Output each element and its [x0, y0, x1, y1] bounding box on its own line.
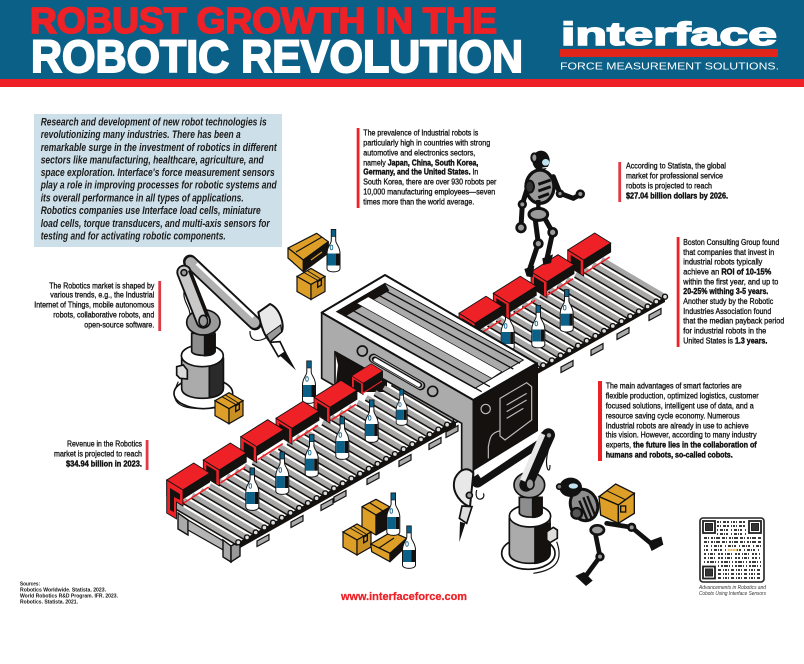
machine opening [335, 352, 387, 392]
bottle behind blocks [302, 361, 316, 403]
company logo [560, 16, 779, 72]
sources: Sources: [20, 582, 40, 588]
panel: introduction: sectors like manufacturing, healthcare, agriculture, and [41, 154, 264, 166]
callout: smart factories: The main advantages of smart factories are [606, 381, 742, 391]
sources: Robotics. Statista. 2021. [20, 600, 78, 606]
callout: smart factories: flexible production, optimized logistics, customer [606, 391, 759, 401]
front conveyor [175, 382, 458, 562]
walking robot [517, 151, 584, 277]
callout: industrial robot density: automotive and electronics sectors, [363, 147, 475, 157]
conveyor legs [178, 426, 458, 562]
sources: Robotics Worldwide. Statista. 2023. [20, 588, 106, 594]
wide box [288, 233, 328, 272]
arm two wrist and tool [454, 469, 473, 507]
callout: professional service robots market [618, 161, 728, 202]
panel: introduction: load cells, torque transducers, and multi-axis sensors for [41, 218, 270, 230]
callout: robotics market trends [34, 280, 161, 331]
callout: smart factories: experts, the future lies in the collaboration of [606, 440, 757, 450]
boxes and bottle upper [288, 230, 340, 300]
red blocks back [459, 233, 611, 339]
callout: return on investment: 20-25% withing 3-5 years. [683, 286, 768, 296]
callout: industrial robot density: South Korea, there are over 930 robots per [363, 177, 496, 187]
red blocks front [167, 364, 383, 519]
callout: robotics revenue: market is projected to reach [54, 449, 142, 459]
right face [473, 363, 537, 470]
robot arm left [174, 262, 296, 409]
callout: return on investment: achieve an ROI of 10-15% [683, 266, 772, 276]
callout: robotics revenue: $34.94 billion in 2023. [66, 458, 142, 468]
header banner [0, 0, 804, 87]
panel: introduction: play a role in improving processes for robotic systems and [40, 180, 277, 192]
callout: robotics market trends: various trends, e.g., the Industrial [50, 290, 154, 300]
company logo: interface [561, 16, 777, 52]
callout: return on investment: that the median payback period [683, 316, 785, 326]
QR code [700, 518, 764, 582]
robot torso [566, 485, 602, 525]
sources: World Robotics R&D Program. IFR. 2023. [20, 594, 118, 600]
callout: robotics market trends: open-source software. [84, 320, 154, 330]
QR finder squares [703, 521, 761, 578]
callout: smart factories: this vision. However, according to many industry [606, 430, 757, 440]
robot head [559, 478, 582, 497]
callout: industrial robot density: Germany, and the United States. In [363, 167, 479, 177]
title line one: ROBUST GROWTH IN THE [30, 0, 497, 41]
machine housing [322, 275, 537, 479]
callout: industrial robot density: times more than the world average. [363, 197, 474, 207]
panel: introduction [34, 114, 282, 247]
top deck [322, 275, 537, 400]
website url: www.interfaceforce.com [340, 591, 467, 603]
title line two: ROBOTIC REVOLUTION [31, 31, 523, 82]
right face control panel [481, 383, 532, 458]
callout: industrial robot density: 10,000 manufacturing employees—seven [363, 187, 496, 197]
callout: smart factories: focused solutions, intelligent use of data, and a [606, 400, 754, 410]
panel: introduction: testing and for activating robotic components. [41, 230, 226, 242]
callout: professional service robots market: market for professional service [626, 171, 723, 181]
panel: introduction: remarkable surge in the investment of robotics in different [41, 142, 277, 154]
callout: professional service robots market: robots is projected to reach [626, 181, 712, 191]
callout: robotics market trends: robots, collaborative robots, and [53, 310, 155, 320]
callout: smart factories: resource saving cycle economy. Numerous [606, 410, 740, 420]
QR caption: Cobots Using Interface Sensors [699, 591, 766, 597]
callout: robotics revenue: Revenue in the Robotics [67, 439, 142, 449]
callout: return on investment: Boston Consulting Group found [683, 237, 780, 247]
wide gold box [371, 532, 407, 562]
callout: smart factories: Industrial robots are already in use to achieve [606, 420, 749, 430]
arm two links [477, 435, 548, 482]
callout: return on investment: United States is 1.3 years. [683, 335, 767, 345]
first block tall frame [167, 480, 183, 519]
back conveyor [459, 233, 665, 381]
small box near left robot [215, 393, 243, 424]
callout: professional service robots market: $27.04 billion dollars by 2026. [626, 191, 728, 201]
feet [524, 254, 553, 277]
callout: industrial robot density: particularly high in countries with strong [363, 138, 491, 148]
callout: robotics market trends: The Robotics market is shaped by [49, 280, 155, 290]
pelvis [529, 208, 548, 220]
callout: industrial robot density: namely Japan, China, South Korea, [363, 157, 478, 167]
callout: return on investment [677, 237, 785, 347]
torso [526, 170, 554, 203]
machine slot [373, 358, 421, 386]
bottles on front conveyor [246, 389, 407, 510]
panel: introduction: Research and development of new robot technologies is [41, 116, 267, 128]
boxes and bottles group lower [343, 493, 416, 568]
arm links [190, 262, 255, 323]
panel: introduction: revolutionizing many industries. There has been a [41, 129, 241, 141]
company logo: FORCE MEASUREMENT SOLUTIONS. [560, 62, 779, 72]
bottles on back conveyor [501, 290, 573, 350]
callout: professional service robots market: According to Statista, the global [626, 161, 726, 171]
callout: smart factories: humans and robots, so-called cobots. [606, 450, 733, 460]
head [532, 151, 550, 171]
callout: return on investment: Industries Association found [683, 306, 772, 316]
callout: industrial robot density: The prevalence of Industrial robots is [363, 128, 478, 138]
robot arm right [454, 432, 559, 573]
callout: industrial robot density [357, 128, 496, 208]
QR centre mark [728, 549, 737, 551]
QR caption: Advancements in Robotics and [698, 585, 766, 591]
panel: introduction: Robotics companies use Interface load cells, miniature [41, 205, 261, 217]
callout: return on investment: for industrial robots in the [683, 326, 767, 336]
arm base [174, 310, 233, 409]
arm two base [502, 472, 557, 569]
robot joints [517, 191, 584, 248]
callout: robotics market trends: Internet of Things, mobile autonomous [34, 300, 154, 310]
QR modules [704, 522, 761, 578]
callout: robotics revenue [54, 439, 148, 470]
QR caption [698, 585, 766, 597]
arm wrist and tool [258, 304, 283, 342]
panel: introduction: space exploration. Interface's force measurement sensors [41, 167, 275, 179]
callout: smart factories [598, 381, 759, 461]
sources [20, 582, 118, 606]
carried box [599, 484, 634, 505]
tall box [362, 499, 390, 535]
carrying robot [557, 478, 663, 586]
callout: return on investment: Another study by the Robotic [683, 296, 773, 306]
callout: return on investment: within the first year, and up to [682, 276, 779, 286]
machine screws [357, 346, 438, 396]
left face [322, 313, 473, 479]
callout: return on investment: industrial robots typically [683, 257, 763, 267]
panel: introduction: its overall performance in all types of applications. [41, 192, 244, 204]
callout: return on investment: that companies that invest in [683, 247, 775, 257]
